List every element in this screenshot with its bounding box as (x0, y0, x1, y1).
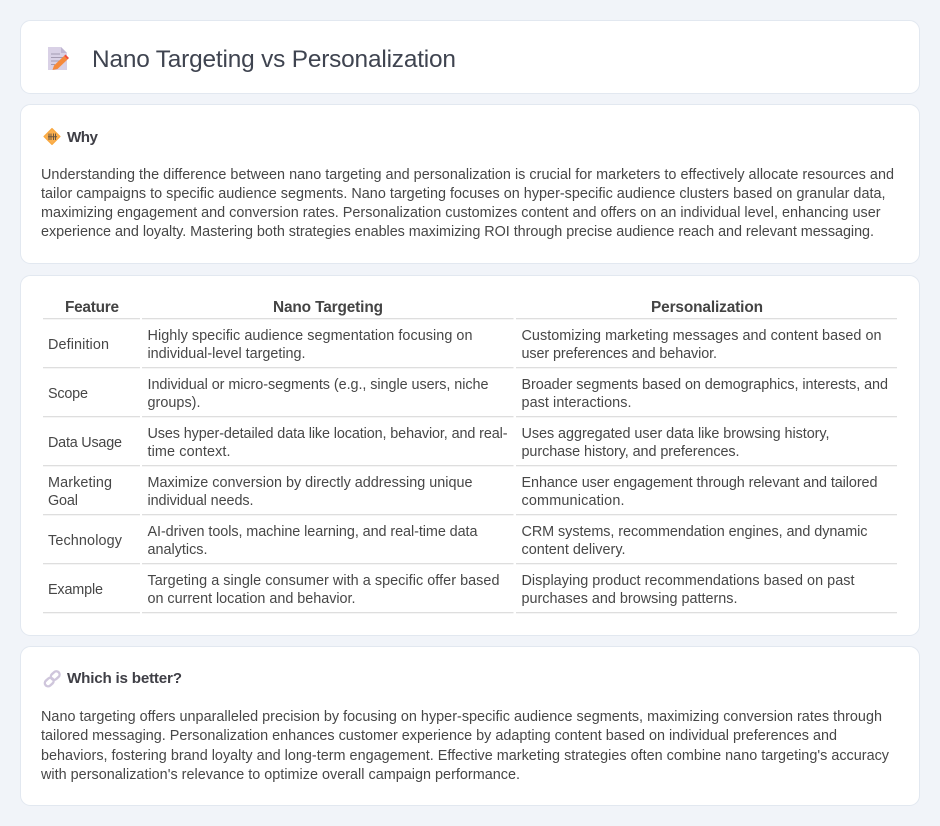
row: data usage: Uses aggregated user data like browsing history, (522, 426, 830, 442)
row: scope: groups). (148, 395, 200, 411)
text block: which is better paragraph: Nano targeting offers unparalleled precision by focusing on hyper-specific audience segments, maximizing conversion rates through (41, 709, 882, 725)
row: example: Displaying product recommendations based on past (522, 573, 854, 589)
text block: why paragraph: Understanding the difference between nano targeting and personalization is crucial for marketers to effectively allocate resources and (41, 167, 894, 183)
icon: link (44, 670, 61, 688)
panel: which is better (20, 646, 920, 806)
row: data usage: time context. (148, 444, 230, 460)
panel: comparison table (20, 276, 920, 636)
row: definition: user preferences and behavior. (522, 346, 717, 362)
table header row: Personalization (651, 299, 763, 316)
row: example: on current location and behavior. (148, 591, 356, 607)
row: example: purchases and browsing patterns. (522, 591, 738, 607)
row: definition: Highly specific audience segmentation focusing on (148, 328, 472, 344)
row: definition (48, 328, 882, 362)
table header row: Feature (65, 299, 119, 316)
text block: which is better paragraph: tailored messaging. Personalization enhances customer experience by adapting content based on individual preferences and (41, 728, 837, 744)
row: data usage: purchase history, and preferences. (522, 444, 740, 460)
row: data usage (48, 426, 830, 460)
row: technology: AI-driven tools, machine learning, and real-time data (148, 524, 478, 540)
heading: why: Why (67, 129, 99, 146)
row: scope (48, 377, 888, 411)
row: definition: individual-level targeting. (148, 346, 306, 362)
row: technology: analytics. (148, 542, 208, 558)
row: technology (48, 524, 868, 558)
text block: which is better paragraph: behaviors, fostering brand loyalty and long-term engagement. Effective marketing strategies often combine nano targeting's accuracy (41, 748, 890, 764)
text block: which is better paragraph (40, 709, 890, 783)
text block: why paragraph (41, 167, 894, 240)
panel: why (20, 104, 920, 264)
text block: why paragraph: tailor campaigns to specific audience segments. Nano targeting focuses on hyper-specific audience clusters based on granular data, (41, 186, 886, 202)
row: marketing goal: communication. (522, 493, 624, 509)
row: technology: CRM systems, recommendation engines, and dynamic (522, 524, 868, 540)
table header row: Nano Targeting (273, 299, 383, 316)
row: scope: Scope (48, 386, 88, 402)
row: example (48, 573, 854, 607)
row: technology: content delivery. (522, 542, 626, 558)
row: marketing goal (48, 475, 878, 509)
row: marketing goal: Marketing (48, 475, 112, 491)
icon: orange warning diamond (44, 128, 60, 144)
text block: why paragraph: maximizing engagement and conversion rates. Personalization customizes content and offers on an individual level, enhancing user (41, 205, 881, 221)
row: data usage: Uses hyper-detailed data like location, behavior, and real- (148, 426, 508, 442)
text block: which is better paragraph: with personalization's relevance to optimize overall campaign performance. (40, 767, 520, 783)
row: definition: Customizing marketing messages and content based on (522, 328, 882, 344)
panel: title header (20, 20, 920, 94)
row: scope: Broader segments based on demographics, interests, and (522, 377, 888, 393)
heading: which is better: Which is better? (67, 670, 182, 687)
row: definition: Definition (48, 337, 109, 353)
row: example: Example (48, 582, 103, 598)
title: Nano Targeting vs Personalization (92, 46, 456, 73)
row: marketing goal: individual needs. (148, 493, 254, 509)
text block: why paragraph: experience and loyalty. Mastering both strategies enables maximizing ROI through precise audience reach and relevant messaging. (41, 224, 874, 240)
row: marketing goal: Enhance user engagement through relevant and tailored (522, 475, 878, 491)
icon: memo with pencil (48, 47, 69, 70)
row: marketing goal: Maximize conversion by directly addressing unique (148, 475, 472, 491)
row: scope: Individual or micro-segments (e.g., single users, niche (148, 377, 488, 393)
row: marketing goal: Goal (48, 493, 78, 509)
table header row (65, 299, 763, 316)
row: scope: past interactions. (522, 395, 632, 411)
row: data usage: Data Usage (48, 435, 122, 451)
row: technology: Technology (48, 533, 123, 549)
row: example: Targeting a single consumer with a specific offer based (148, 573, 500, 589)
